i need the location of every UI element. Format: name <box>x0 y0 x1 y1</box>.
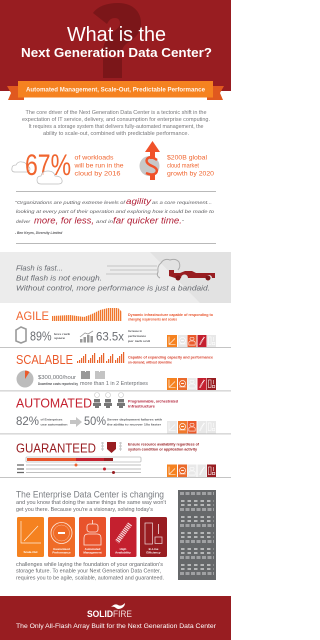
section: scalable: $300,000/hour <box>38 375 76 381</box>
text: closing intro <box>16 500 167 513</box>
intro text: The core driver of the Next Generation Data Center is a tectonic shift in the <box>26 110 207 116</box>
quote: " <box>182 219 184 225</box>
chart: waveform <box>52 308 122 321</box>
text: closing intro: get you there. Because you're a visionary, solving today's <box>16 507 153 513</box>
heading: enterprise data center: The Enterprise Data Center is changing <box>16 490 164 500</box>
title: What is the <box>67 23 166 46</box>
icons: attribute tiles <box>167 464 216 477</box>
section: scalable: Downtime costs reported by <box>38 382 78 386</box>
panel: flash is fast: But flash is not enough. <box>16 274 102 282</box>
section: agile: AGILE <box>16 309 49 323</box>
section: automated: Programmable, orchestrated <box>128 400 178 404</box>
stat: cloud market growth: $200B global <box>167 154 207 162</box>
section: automated: 50% <box>84 416 106 428</box>
section: automated <box>16 392 216 434</box>
text: closing paragraph <box>16 562 164 582</box>
section: agile: less rack <box>54 332 70 336</box>
panel: flash is fast: Flash is fast... <box>16 264 63 272</box>
icons: servers <box>81 371 105 379</box>
section: scalable: SCALABLE <box>16 353 73 367</box>
section: guaranteed: system condition or application activity <box>128 448 197 452</box>
icons: attribute tiles <box>167 378 216 390</box>
section: automated: of Enterprises <box>40 418 63 422</box>
quote: as a core requirement... <box>152 200 212 206</box>
stat: 67 percent of workloads <box>12 149 124 184</box>
icons: robots <box>93 392 125 408</box>
tile: automated management <box>79 517 106 557</box>
icons: attribute tiles <box>167 421 216 434</box>
logo: solidfire: SOLID <box>87 609 113 619</box>
section: agile: changing requirements and scales <box>128 318 177 322</box>
quote: - Ben Keyes, Diversity Limited <box>15 231 63 235</box>
intro text: expectation of IT service, delivery, and consumption for enterprise computing. <box>22 117 210 123</box>
panel: flash is fast: Without control, more performance is just a bandaid. <box>16 284 210 292</box>
stat: 67 percent of workloads: 67% <box>25 149 71 182</box>
quote <box>15 191 216 244</box>
chart: guarantee slider bars <box>17 457 141 474</box>
section: scalable: more than 1 in 2 Enterprises <box>80 381 149 387</box>
section: agile: per rack unit <box>128 339 150 343</box>
quote: deliver <box>16 219 31 225</box>
stat: 67 percent of workloads: cloud by 2016 <box>74 170 121 178</box>
intro text: It requires a storage system that delivers fully-automated management, the <box>28 124 204 130</box>
section: automated: AUTOMATED <box>16 396 92 410</box>
icon: question mark <box>93 3 141 78</box>
ribbon banner <box>7 81 224 100</box>
icon: clouds <box>12 162 30 172</box>
icon: performance bars <box>80 331 93 342</box>
logo: solidfire: FIRE <box>113 609 132 619</box>
tagline: The Only All-Flash Array Built for the Next Generation Data Center <box>16 623 216 630</box>
icon: server rack <box>178 490 216 580</box>
tile: scale-out <box>17 517 44 557</box>
stat: cloud market growth: cloud market <box>167 162 199 170</box>
section: guaranteed: Ensure resource availability regardless of <box>128 442 200 446</box>
section: scalable: on-demand, without downtime <box>128 360 172 364</box>
quote: far quicker time. <box>113 216 182 226</box>
ribbon banner: Automated Management, Scale-Out, Predictable Performance <box>26 86 205 94</box>
title <box>21 23 212 60</box>
tile: guaranteed performance: Performance <box>52 550 71 554</box>
section: agile: 89% <box>30 330 52 344</box>
footer <box>0 596 231 640</box>
text: closing intro: and you know that doing the same things the same way won't <box>16 500 167 506</box>
logo: solidfire <box>87 603 132 619</box>
icon: dollar arrow <box>140 141 160 180</box>
text: closing paragraph: challenges while laying the foundation of your organization's <box>16 562 163 568</box>
tile: high availability <box>110 517 136 557</box>
chart: pie <box>16 370 34 388</box>
section: scalable <box>16 352 216 390</box>
tile: guaranteed performance <box>48 517 75 557</box>
quote: more, for less, <box>34 216 94 226</box>
header panel <box>0 0 231 91</box>
tile: scale-out: Scale-Out <box>23 550 38 554</box>
section: automated: 82% <box>16 416 39 428</box>
intro text <box>22 110 210 137</box>
quote: looking at every part of their operation and exploring how it could be made to <box>16 209 214 215</box>
section: agile: space <box>54 336 65 340</box>
icon: rack <box>16 327 26 343</box>
text: closing paragraph: requires you to be agile, scalable, automated and guaranteed. <box>16 576 164 582</box>
icon: shield <box>101 442 122 453</box>
section: automated: the ability to recover 10x faster <box>107 422 162 426</box>
tile: guaranteed performance: Guaranteed <box>53 547 70 551</box>
tile: high availability: Availability <box>115 550 131 554</box>
stat: 67 percent of workloads: will be run in the <box>73 162 124 170</box>
section: guaranteed <box>16 442 216 477</box>
quote: "Organizations are putting extreme levels of <box>15 200 126 206</box>
tile: in-line efficiency <box>140 517 167 557</box>
stat: 67 percent of workloads: of workloads <box>74 154 114 162</box>
quote: and in <box>96 219 113 225</box>
section: agile: performance <box>128 334 146 338</box>
text: closing paragraph: storage future. To enable your Next Generation Data Center, <box>16 568 161 574</box>
section: automated: use automation <box>40 422 68 426</box>
tile: automated management: Management <box>83 550 102 554</box>
tiles: challenges <box>17 517 167 557</box>
section: scalable: Capable of expanding capacity and performance <box>128 356 213 360</box>
section: agile: 63.5x <box>96 330 124 344</box>
stat: cloud market growth: growth by 2020 <box>167 170 215 178</box>
section: agile <box>16 308 216 347</box>
chart: rising bars <box>77 352 124 363</box>
tile: high availability: High <box>120 547 126 551</box>
section: automated: Server deployment failures with <box>107 418 162 422</box>
section: agile: Increase in <box>128 329 142 333</box>
stat: cloud market growth <box>140 141 215 180</box>
intro text: ability to scale-out, combined with predictable performance. <box>43 131 189 137</box>
section: automated: infrastructure <box>128 404 155 408</box>
section: guaranteed: GUARANTEED <box>16 442 96 456</box>
section: agile: Dynamic infrastructure capable of responding to <box>128 313 213 317</box>
tile: automated management: Automated <box>85 547 100 551</box>
icon: race car <box>106 259 215 280</box>
icons: attribute tiles <box>167 335 216 347</box>
panel: flash is fast <box>0 252 231 303</box>
title: Next Generation Data Center? <box>21 46 212 60</box>
tile: in-line efficiency: Efficiency <box>146 550 161 554</box>
quote: agility <box>126 196 152 206</box>
tile: in-line efficiency: In-Line <box>149 547 159 551</box>
icon: arrow <box>70 417 82 427</box>
